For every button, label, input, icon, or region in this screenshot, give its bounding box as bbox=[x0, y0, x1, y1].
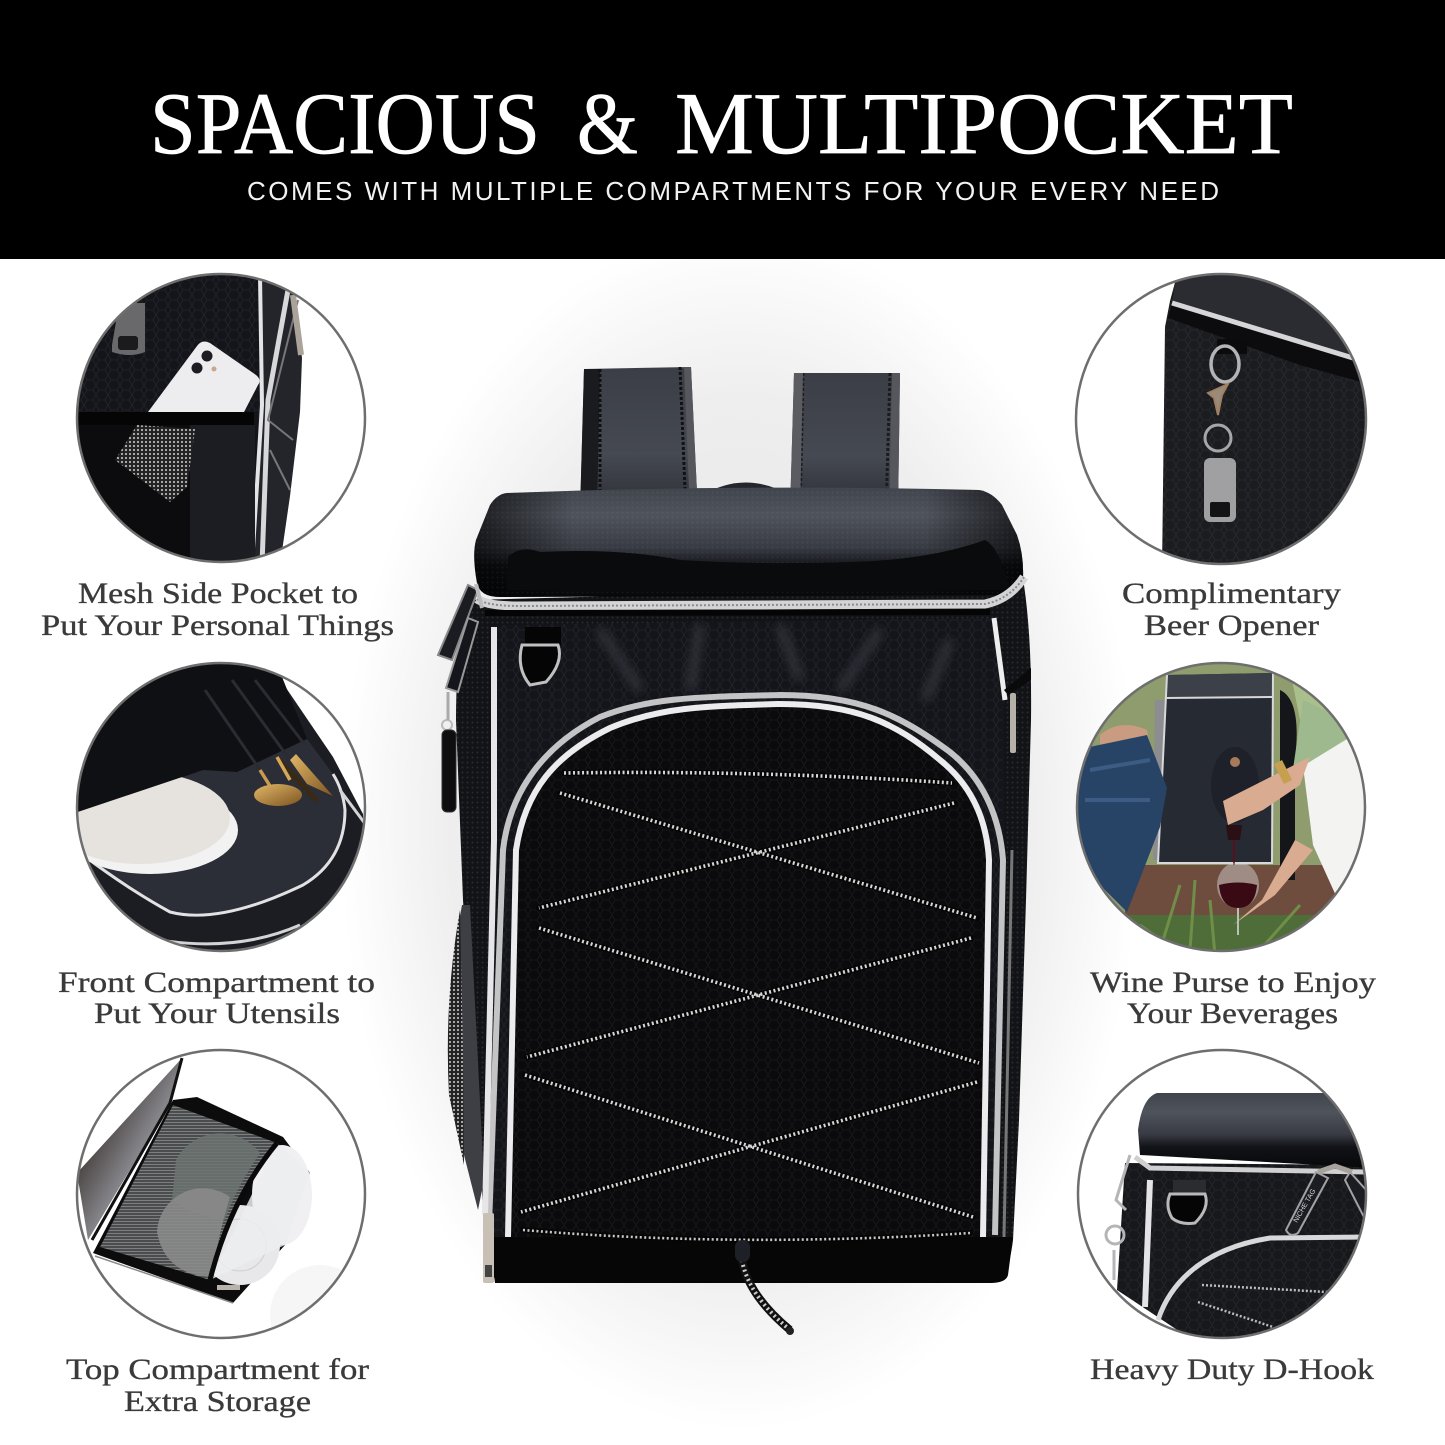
cord stopper and tail bbox=[735, 1240, 794, 1335]
icon: bottle opener bbox=[112, 303, 145, 355]
label: top compartment bbox=[66, 1353, 369, 1418]
flap bbox=[78, 664, 307, 812]
wine glass and spout bbox=[1217, 825, 1259, 935]
bungee cords bbox=[521, 772, 979, 1240]
label: wine purse bbox=[1090, 966, 1376, 1030]
panel: front compartment bbox=[76, 662, 366, 952]
person with jeans bbox=[1075, 725, 1167, 912]
top zipper bbox=[477, 577, 1024, 613]
title: & bbox=[577, 76, 638, 173]
side piping bbox=[485, 618, 1012, 1237]
mesh side pocket bbox=[448, 905, 484, 1210]
mesh pocket bbox=[78, 412, 255, 558]
label: beer opener: Beer Opener bbox=[1144, 609, 1319, 642]
panel: top compartment bbox=[76, 1048, 366, 1340]
main backpack photo bbox=[438, 367, 1031, 1335]
label: top compartment: Top Compartment for bbox=[66, 1353, 369, 1386]
icon: keychain with opener bbox=[1204, 339, 1247, 522]
person with white sleeve bbox=[1223, 700, 1372, 925]
label: beer opener bbox=[1122, 577, 1341, 642]
smartphone bbox=[148, 342, 260, 414]
mesh interior bbox=[100, 1105, 277, 1280]
label: top compartment: Extra Storage bbox=[124, 1385, 311, 1418]
label: mesh side pocket bbox=[41, 577, 394, 642]
label: front compartment: Put Your Utensils bbox=[94, 997, 340, 1030]
plates bbox=[78, 777, 238, 874]
label: D-hook: Heavy Duty D-Hook bbox=[1090, 1353, 1374, 1386]
shoulder straps bbox=[580, 367, 900, 513]
gold utensils bbox=[254, 754, 333, 806]
padded lid bbox=[474, 488, 1023, 597]
carabiner bbox=[1106, 1155, 1130, 1280]
backpack body bbox=[456, 585, 1031, 1283]
zipper tags and keychain bbox=[438, 584, 482, 812]
label: wine purse: Wine Purse to Enjoy bbox=[1090, 966, 1376, 999]
label: mesh side pocket: Mesh Side Pocket to bbox=[78, 577, 358, 610]
cords bbox=[1198, 1285, 1327, 1327]
zipper pull bbox=[217, 1285, 240, 1290]
label: wine purse: Your Beverages bbox=[1127, 997, 1338, 1030]
silver lid bbox=[77, 1058, 182, 1240]
zipper tags bbox=[1286, 1166, 1375, 1235]
title: MULTIPOCKET bbox=[675, 76, 1293, 173]
log and grass bbox=[1125, 865, 1335, 950]
panel: mesh side pocket bbox=[70, 270, 380, 570]
label: front compartment bbox=[58, 966, 375, 1030]
header banner bbox=[0, 0, 1445, 259]
D-ring bbox=[1168, 1180, 1206, 1223]
title: SPACIOUS bbox=[150, 76, 540, 173]
D-ring bbox=[520, 627, 561, 685]
label: front compartment: Front Compartment to bbox=[58, 966, 375, 999]
label: beer opener: Complimentary bbox=[1122, 577, 1341, 610]
backpack in photo bbox=[1153, 673, 1297, 880]
panel: D-hook bbox=[1070, 1045, 1380, 1345]
side and bottom zipper pulls bbox=[483, 668, 1031, 1283]
subtitle: COMES WITH MULTIPLE COMPARTMENTS FOR YOUR EVERY NEED bbox=[247, 176, 1219, 206]
front pocket bbox=[489, 695, 1003, 1237]
panel: wine purse photo bbox=[1070, 660, 1380, 960]
panel: beer opener bbox=[1070, 270, 1380, 570]
white plates bbox=[212, 1143, 312, 1285]
zipper tags: NICHE TAG bbox=[1293, 1188, 1317, 1224]
bag shell bbox=[93, 1097, 310, 1303]
label: mesh side pocket: Put Your Personal Things bbox=[41, 609, 394, 642]
